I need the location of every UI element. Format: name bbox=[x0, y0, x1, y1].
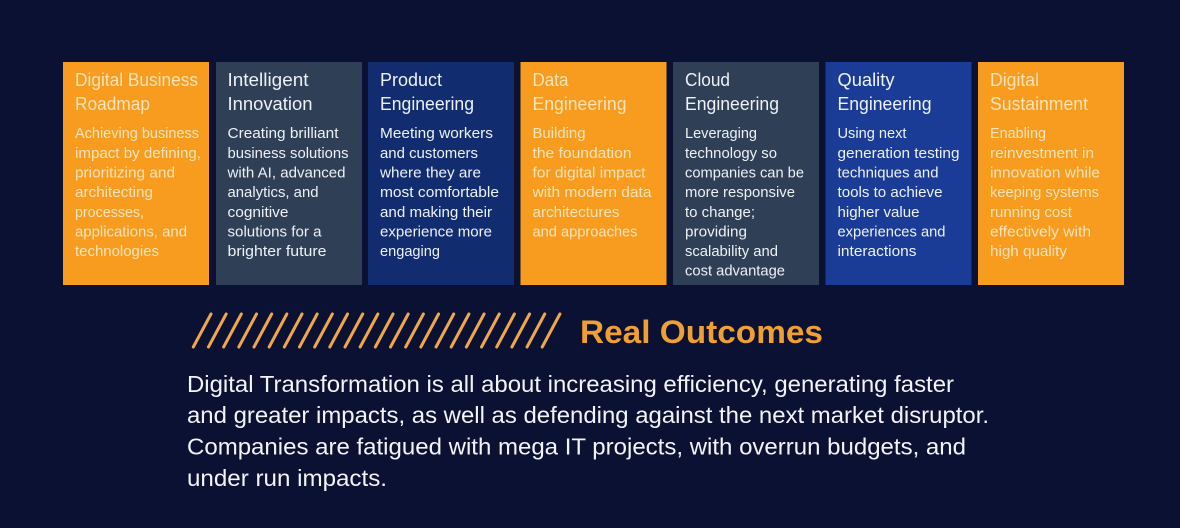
text: Intelligent Innovation description bbox=[226, 126, 348, 260]
panel: Digital Sustainment bbox=[978, 62, 1124, 285]
text: Data Engineering description bbox=[531, 126, 652, 240]
text: Quality Engineering description: higher value bbox=[838, 205, 920, 221]
heading: Digital Business Roadmap: Digital Business bbox=[75, 70, 198, 90]
panel: Intelligent Innovation bbox=[216, 62, 362, 285]
text: Intelligent Innovation description: with AI, advanced bbox=[226, 166, 346, 182]
heading: Cloud Engineering: Cloud bbox=[685, 70, 730, 90]
heading: Digital Business Roadmap: Roadmap bbox=[75, 94, 150, 114]
heading: Digital Sustainment: Digital bbox=[990, 70, 1039, 90]
text: Cloud Engineering description: scalability and bbox=[685, 244, 778, 260]
text: Product Engineering description: engaging bbox=[380, 244, 440, 260]
text: Digital Sustainment description: keeping systems bbox=[990, 185, 1099, 201]
heading: Real Outcomes: Real Outcomes bbox=[580, 314, 823, 350]
text: Data Engineering description: the foundation bbox=[532, 146, 632, 162]
text: Digital Business Roadmap description: architecting bbox=[75, 185, 153, 201]
text: Intelligent Innovation description: Creating brilliant bbox=[228, 126, 338, 142]
text: Digital Sustainment description: effectively with bbox=[990, 224, 1091, 240]
text: Quality Engineering description: Using next bbox=[838, 126, 906, 142]
heading: Product Engineering: Product bbox=[380, 70, 442, 90]
heading: Cloud Engineering: Engineering bbox=[685, 94, 779, 114]
heading: Data Engineering: Engineering bbox=[532, 94, 626, 114]
text: Data Engineering description: architectures bbox=[532, 205, 620, 221]
text: Intelligent Innovation description: cognitive bbox=[228, 205, 288, 221]
text: Digital Sustainment description bbox=[990, 126, 1100, 260]
heading: Digital Sustainment: Sustainment bbox=[990, 94, 1088, 114]
text: Cloud Engineering description: companies can be bbox=[685, 166, 804, 182]
heading: Intelligent Innovation: Intelligent bbox=[228, 70, 308, 90]
text: Digital Transformation paragraph: Companies are fatigued with mega IT projects, with overrun budgets, and bbox=[187, 434, 966, 460]
text: Product Engineering description: and customers bbox=[380, 146, 478, 162]
text: Digital Business Roadmap description: Achieving business bbox=[75, 126, 199, 142]
heading: Cloud Engineering bbox=[685, 70, 779, 114]
text: Quality Engineering description: generation testing bbox=[838, 146, 960, 162]
text: Quality Engineering description: techniques and bbox=[838, 166, 938, 182]
heading: Intelligent Innovation: Innovation bbox=[228, 94, 312, 114]
text: Intelligent Innovation description: business solutions bbox=[228, 146, 348, 162]
text: Product Engineering description: Meeting workers bbox=[380, 126, 493, 142]
text: Data Engineering description: and approaches bbox=[532, 224, 638, 240]
panel: Product Engineering bbox=[368, 62, 514, 285]
text: Digital Business Roadmap description: applications, and bbox=[75, 224, 187, 240]
text: Digital Sustainment description: high quality bbox=[990, 244, 1068, 260]
heading: Intelligent Innovation bbox=[228, 70, 312, 114]
heading: Data Engineering bbox=[532, 70, 626, 114]
text: Product Engineering description: most comfortable bbox=[380, 185, 499, 201]
heading: Quality Engineering bbox=[838, 70, 932, 114]
text: Quality Engineering description: tools to achieve bbox=[838, 185, 942, 201]
text: Digital Transformation paragraph: Digital Transformation is all about increasing efficiency, generating faster bbox=[187, 371, 954, 397]
text: Digital Transformation paragraph bbox=[187, 371, 989, 491]
heading: Digital Business Roadmap bbox=[75, 70, 198, 114]
text: Quality Engineering description: experiences and bbox=[838, 224, 946, 240]
text: Product Engineering description: experience more bbox=[380, 224, 492, 240]
text: Digital Sustainment description: innovation while bbox=[990, 166, 1100, 182]
text: Digital Transformation paragraph: and greater impacts, as well as defending against the next market disruptor. bbox=[187, 402, 989, 428]
text: Product Engineering description: and making their bbox=[380, 205, 492, 221]
text: Cloud Engineering description: more responsive bbox=[685, 185, 795, 201]
text: Digital Sustainment description: running cost bbox=[990, 205, 1072, 221]
text: Quality Engineering description bbox=[838, 126, 960, 260]
text: Digital Business Roadmap description bbox=[75, 126, 201, 260]
panel: Digital Business Roadmap bbox=[63, 62, 209, 285]
heading: Product Engineering bbox=[380, 70, 474, 114]
panel: Cloud Engineering bbox=[673, 62, 819, 285]
text: Digital Business Roadmap description: processes, bbox=[75, 205, 144, 221]
text: Intelligent Innovation description: brighter future bbox=[228, 244, 326, 260]
text: Digital Sustainment description: reinvestment in bbox=[990, 146, 1094, 162]
text: Product Engineering description: where they are bbox=[379, 166, 481, 182]
text: Cloud Engineering description: providing bbox=[685, 224, 747, 240]
heading: Quality Engineering: Quality bbox=[838, 70, 894, 90]
panel: Quality Engineering bbox=[826, 62, 972, 285]
text: Cloud Engineering description: to change; bbox=[685, 205, 755, 221]
heading: Quality Engineering: Engineering bbox=[838, 94, 932, 114]
text: Data Engineering description: Building bbox=[532, 126, 586, 142]
text: Digital Sustainment description: Enabling bbox=[990, 126, 1046, 142]
text: Digital Business Roadmap description: technologies bbox=[75, 244, 159, 260]
text: Intelligent Innovation description: analytics, and bbox=[228, 185, 318, 201]
text: Data Engineering description: for digital impact bbox=[532, 166, 646, 182]
text: Data Engineering description: with modern data bbox=[531, 185, 652, 201]
panel: Data Engineering bbox=[520, 62, 666, 285]
heading: Digital Sustainment bbox=[990, 70, 1088, 114]
text: Cloud Engineering description bbox=[685, 126, 804, 280]
text: Digital Business Roadmap description: impact by defining, bbox=[75, 146, 201, 162]
text: Cloud Engineering description: Leveraging bbox=[685, 126, 757, 142]
text: Digital Transformation paragraph: under run impacts. bbox=[187, 465, 387, 491]
text: Cloud Engineering description: technology so bbox=[685, 146, 777, 162]
text: Cloud Engineering description: cost advantage bbox=[685, 264, 785, 280]
text: Intelligent Innovation description: solutions for a bbox=[228, 224, 322, 240]
heading: Product Engineering: Engineering bbox=[380, 94, 474, 114]
text: Product Engineering description bbox=[379, 126, 499, 260]
decorative hatch bar bbox=[193, 314, 560, 347]
heading: Data Engineering: Data bbox=[532, 70, 569, 90]
text: Digital Business Roadmap description: prioritizing and bbox=[75, 166, 175, 182]
text: Quality Engineering description: interactions bbox=[838, 244, 916, 260]
